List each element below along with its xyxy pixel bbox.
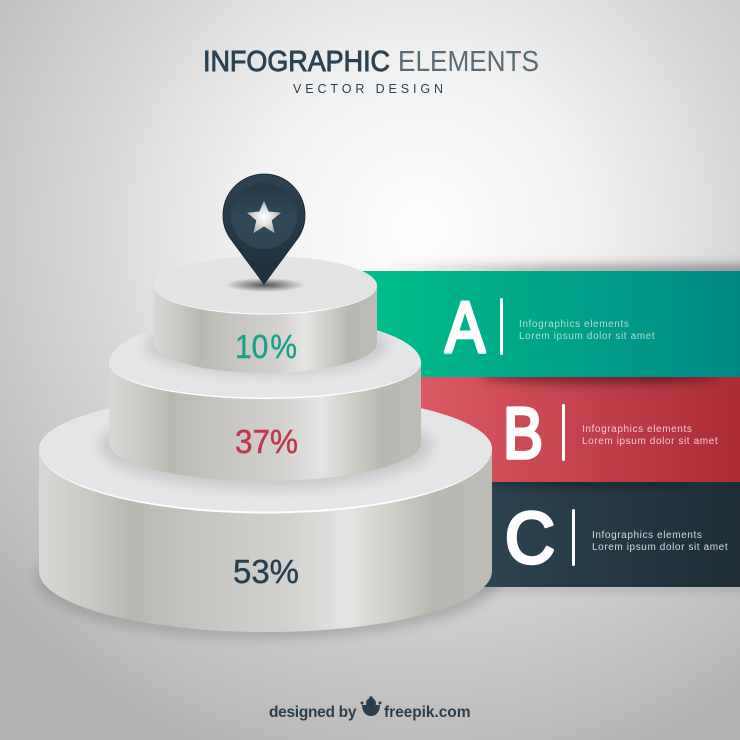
pin body	[223, 174, 305, 284]
top tier cast shadow	[144, 332, 388, 378]
panel: option ribbons	[360, 265, 740, 590]
divider C	[572, 509, 575, 566]
label 10%: 10 %	[235, 328, 297, 365]
label 53%: 53%	[233, 553, 299, 590]
text B: Infographics elements	[582, 424, 692, 435]
text C: Lorem ipsum dolor sit amet	[592, 542, 728, 553]
top tier 10%	[154, 256, 377, 373]
letter C: C	[505, 499, 555, 579]
icon: map pin with star	[223, 174, 305, 292]
ribbon C	[484, 482, 740, 587]
divider B	[562, 404, 565, 461]
panel: pyramid of cylinders	[39, 256, 492, 632]
text C: Infographics elements	[592, 530, 702, 541]
footer credit	[269, 696, 470, 721]
text A: Lorem ipsum dolor sit amet	[519, 331, 655, 342]
ribbon B cast shadow	[492, 482, 676, 488]
ribbon bottom shadow	[480, 584, 740, 590]
ribbon A	[360, 271, 740, 377]
middle tier cast shadow	[98, 428, 434, 492]
icon: freepik crown	[360, 696, 382, 716]
subtitle: VECTOR DESIGN	[293, 82, 447, 96]
star	[247, 201, 281, 233]
pin inner disc	[231, 183, 297, 249]
middle tier 37%	[109, 316, 421, 481]
ground shadow	[36, 518, 500, 638]
title word: infographic: INFOGRAPHIC	[203, 46, 390, 78]
divider A	[500, 298, 503, 355]
label 37%: 37%	[235, 423, 298, 460]
pin shadow	[225, 278, 305, 292]
letter B: B	[503, 394, 543, 474]
text A: Infographics elements	[519, 319, 629, 330]
ribbon B	[421, 377, 740, 482]
text B: Lorem ipsum dolor sit amet	[582, 436, 718, 447]
bottom tier 53%	[39, 393, 492, 632]
letter A: A	[445, 288, 485, 368]
footer credit: designed by	[269, 704, 357, 721]
title word: elements: ELEMENTS	[398, 46, 539, 78]
credit domain: freepik.com	[384, 704, 470, 721]
ribbon A cast shadow	[480, 369, 720, 383]
title	[203, 46, 539, 96]
ribbon top shadow	[380, 265, 740, 275]
